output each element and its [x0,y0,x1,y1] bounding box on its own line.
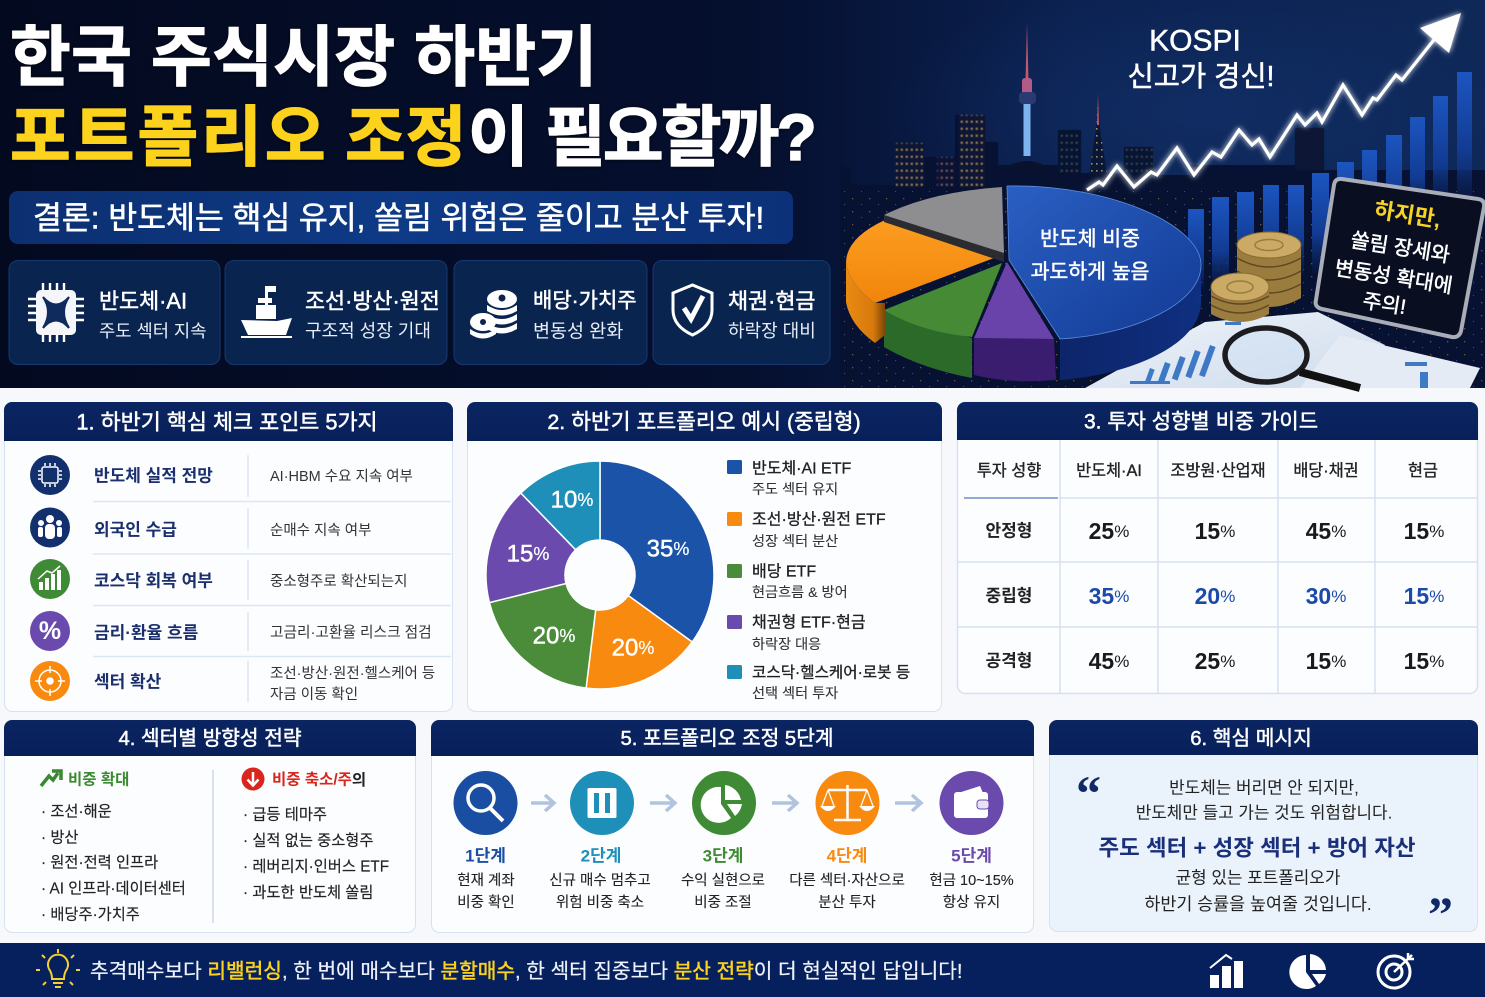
card: bonds cash: 채권·현금 [728,288,815,314]
heading: 4. 섹터별 방향성 전략 [118,727,302,750]
table header: 반도체·AI [1076,462,1142,480]
step 4: 분산 투자 [818,894,876,911]
column: increase weight: · 방산 [41,830,78,846]
takeaway text: 추격매수보다 리밸런싱, 한 번에 매수보다 분할매수, 한 섹터 집중보다 분산 전략이 더 현실적인 답입니다! [90,960,963,983]
step 4 [789,771,905,911]
heading [1049,720,1478,755]
legend: 선택 섹터 투자 [752,686,838,702]
row: kosdaq recovery [30,559,407,599]
donut chart: 35% [647,536,689,562]
row: stable: 25% [1089,518,1129,544]
icon: chip [28,283,84,342]
row: rates and fx [30,611,432,651]
icon: search [468,785,503,821]
row: semiconductor earnings: AI·HBM 수요 지속 여부 [270,468,413,485]
row: neutral: 15% [1404,583,1444,609]
document and magnifier [1085,312,1480,388]
legend: 주도 섹터 유지 [752,482,838,498]
step 2: 2단계 [581,846,621,866]
skyline background [840,115,1485,388]
heading: 3. 투자 성향별 비중 가이드 [1084,410,1318,434]
legend [727,460,910,702]
row: foreign investors: 외국인 수급 [94,520,177,540]
row: neutral: 35% [1089,583,1129,609]
icon: target [1378,953,1414,988]
step 5: 항상 유지 [943,894,1000,911]
step 1: 비중 확인 [457,894,515,911]
callout: KOSPI new high: 신고가 경신! [1128,61,1274,93]
step 5 [929,771,1014,911]
step 5: 5단계 [951,846,992,866]
legend: 코스닥·헬스케어·로봇 등 [752,664,910,682]
step 2: 신규 매수 멈추고 [549,872,651,889]
table header [977,462,1438,480]
card: dividend value: 배당·가치주 [533,290,637,312]
heading [4,402,453,441]
rising line chart arrow [1087,13,1461,190]
row: stable: 15% [1195,518,1235,544]
row: aggressive: 45% [1089,648,1129,674]
icon: pie [1289,954,1326,989]
panel: 2 portfolio example [467,402,942,712]
column: increase weight [41,770,186,924]
highlight message: 주도 섹터 + 성장 섹터 + 방어 자산 [1099,836,1415,860]
conclusion banner [9,191,793,244]
card: semiconductor AI: 반도체·AI [99,288,187,314]
icon: pie [701,785,742,823]
legend: 현금흐름 & 방어 [752,585,848,601]
closing quote: ” [1428,886,1453,942]
3D pie chart: 반도체 비중 [1040,228,1140,250]
icon: scales [820,785,875,820]
card: dividend value [454,260,647,364]
row: stable: 안정형 [986,522,1032,540]
donut chart: 20% [612,634,654,662]
donut chart [486,461,714,689]
icon: ship [241,286,292,338]
column: increase weight: · 배당주·가치주 [41,906,140,924]
legend: 조선·방산·원전 ETF [752,510,886,528]
column: reduce weight: · 실적 없는 중소형주 [243,832,373,850]
icon: light bulb [36,949,80,987]
heading: 1. 하반기 핵심 체크 포인트 5가지 [76,410,378,434]
title [10,20,814,174]
column: increase weight: 비중 확대 [68,770,129,788]
column: increase weight: · 원전·전력 인프라 [41,854,158,872]
donut chart: 10% [551,486,593,514]
step 3: 3단계 [703,846,743,866]
card: shipbuilding defense nuclear [225,260,447,364]
row: neutral: 30% [1306,583,1346,609]
arrow [772,795,797,811]
callout: caution sign: 변동성 확대에 [1333,257,1454,298]
card: semiconductor AI: 주도 섹터 지속 [99,321,206,341]
step 4: 다른 섹터·자산으로 [789,872,905,889]
column: reduce weight: 비중 축소/주의 [272,770,366,788]
blue bar chart [1188,72,1472,289]
column: increase weight: · AI 인프라·데이터센터 [41,880,186,898]
callout: KOSPI new high [1128,24,1274,93]
row: stable: 15% [1404,518,1444,544]
icon: growth bars [1210,955,1243,988]
card: shipbuilding defense nuclear: 구조적 성장 기대 [305,321,431,341]
row: aggressive: 25% [1195,648,1235,674]
column: reduce weight: · 과도한 반도체 쏠림 [243,884,373,902]
title: 포트폴리오 [10,100,329,174]
table header: 현금 [1408,462,1438,480]
panel: 3 allocation guide table [957,402,1478,694]
step 1: 현재 계좌 [457,872,515,889]
panel: 6 key message [1049,720,1478,942]
hero banner [0,0,1485,388]
arrow [650,795,675,811]
table header: 조방원·산업재 [1170,462,1266,480]
3D pie chart [846,186,1201,381]
title: 한국 주식시장 하반기 [10,20,598,94]
legend: 배당 ETF [752,562,816,580]
bottom takeaway bar [0,943,1485,997]
legend: 하락장 대응 [752,637,821,653]
row: neutral: 중립형 [986,586,1032,606]
conclusion banner: 결론: 반도체는 핵심 유지, 쏠림 위험은 줄이고 분산 투자! [33,200,764,236]
row: neutral [986,583,1444,609]
icon: seoul tower [1000,23,1054,172]
row: kosdaq recovery: 중소형주로 확산되는지 [270,573,407,590]
callout: caution sign: 주의! [1361,289,1408,319]
icon: coin stacks [1211,232,1301,322]
card: shipbuilding defense nuclear: 조선·방산·원전 [305,288,440,314]
row: rates and fx: % [39,617,61,645]
row: foreign investors [30,508,371,548]
heading [957,402,1478,440]
title: 조정 [345,100,466,174]
heading [467,402,942,441]
panel: 6 key message: 반도체만 들고 가는 것도 위험합니다. [1136,804,1392,822]
row: stable [986,518,1444,544]
3D pie chart: 과도하게 높음 [1031,260,1149,284]
arrow [895,795,921,811]
title: 이 [468,100,529,174]
callout: caution sign: 하지만, [1373,197,1443,232]
donut chart: 20% [533,622,575,650]
step 1: 1단계 [465,846,506,866]
opening quote: “ [1076,765,1101,821]
step 4: 4단계 [827,846,867,866]
column: reduce weight: · 급등 테마주 [243,806,327,824]
column: increase weight: · 조선·해운 [41,804,112,820]
step 3: 비중 조절 [694,894,752,911]
legend: 채권형 ETF·현금 [752,614,866,632]
heading [431,720,1034,756]
callout: caution sign: 쏠림 장세와 [1349,229,1452,267]
row: sector spread: 섹터 확산 [94,672,162,692]
card: bonds cash: 하락장 대비 [728,321,816,341]
row: rates and fx: 금리·환율 흐름 [94,624,198,642]
table header: 투자 성향 [977,462,1041,480]
step 5: 현금 10~15% [929,872,1014,889]
arrow [531,795,554,811]
panel: 6 key message: 균형 있는 포트폴리오가 [1176,868,1341,888]
legend: 반도체·AI ETF [752,460,851,478]
step 1 [454,771,518,911]
column: reduce weight [242,768,389,902]
icon: down arrow [242,768,264,790]
icon: wallet [954,786,989,818]
row: aggressive [986,648,1444,674]
card: bonds cash [653,260,830,364]
step 3: 수익 실현으로 [681,872,765,889]
title: 필요할까? [545,100,814,174]
panel: 4 sector strategy [4,720,416,932]
card: semiconductor AI [9,260,220,364]
icon: lit skyscraper [1089,93,1107,175]
row: semiconductor earnings: 반도체 실적 전망 [94,466,213,486]
icon: pause [588,788,616,818]
icon: up arrow [41,771,61,786]
panel: 6 key message: 반도체는 버리면 안 되지만, [1169,778,1359,798]
row: sector spread [30,661,435,703]
row: neutral: 20% [1195,583,1235,609]
row: foreign investors: 순매수 지속 여부 [270,522,371,539]
row: sector spread: 조선·방산·원전·헬스케어 등 [270,665,435,682]
step 2 [549,771,651,911]
callout: caution sign [1316,179,1484,337]
row: rates and fx: 고금리·고환율 리스크 점검 [270,624,432,641]
icon: shield [673,285,712,335]
heading: 2. 하반기 포트폴리오 예시 (중립형) [547,410,861,434]
row: semiconductor earnings [30,455,413,495]
donut chart: 15% [507,540,549,568]
callout: KOSPI new high: KOSPI [1149,24,1241,58]
row: sector spread: 자금 이동 확인 [270,686,358,703]
row: stable: 45% [1306,518,1346,544]
row: aggressive: 15% [1306,648,1346,674]
step 2: 위험 비중 축소 [556,894,644,911]
table header: 배당·채권 [1293,462,1359,480]
panel: 5 adjustment steps [431,720,1034,932]
panel: 1 check points [4,402,453,712]
panel: 6 key message: 하반기 승률을 높여줄 것입니다. [1144,894,1372,914]
heading [4,720,416,756]
row: aggressive: 공격형 [986,652,1032,670]
card: dividend value: 변동성 완화 [533,320,623,342]
heading: 6. 핵심 메시지 [1190,727,1312,750]
row: aggressive: 15% [1404,648,1444,674]
icon: coins [470,290,517,338]
column: reduce weight: · 레버리지·인버스 ETF [243,858,389,876]
step 3 [681,771,765,911]
legend: 성장 섹터 분산 [752,534,838,550]
row: kosdaq recovery: 코스닥 회복 여부 [94,572,213,590]
heading: 5. 포트폴리오 조정 5단계 [620,727,834,750]
